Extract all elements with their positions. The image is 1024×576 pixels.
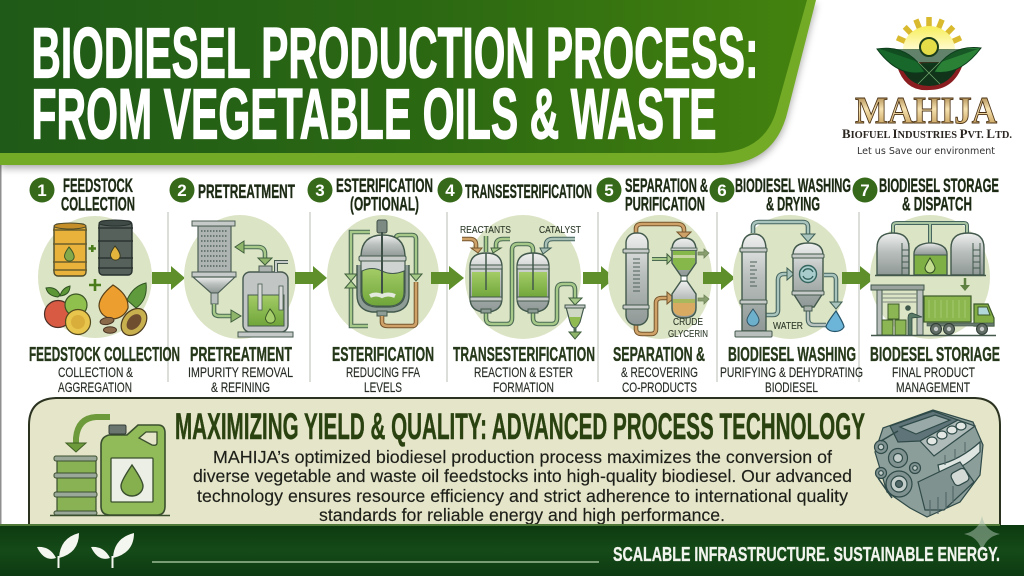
step 4 backdrop <box>465 215 581 339</box>
panel: maximizing yield and quality <box>29 398 1000 560</box>
badge 7 <box>852 178 878 202</box>
step 6 caption: BIODIESEL <box>765 379 818 395</box>
icon: fruits and seeds <box>44 283 152 341</box>
icon: yellow oil barrel <box>53 223 87 276</box>
icon: reactor one <box>470 253 502 313</box>
step 1 heading: FEEDSTOCK <box>63 176 133 197</box>
icon: water drop <box>826 311 844 332</box>
title <box>32 14 759 154</box>
icon: washing column <box>735 234 772 337</box>
badge 4: 4 <box>445 181 455 200</box>
icon: storage pipes <box>893 223 967 243</box>
badge 1: 1 <box>37 181 47 200</box>
footer rule <box>152 561 599 563</box>
panel body text <box>193 447 852 525</box>
step 3 heading: (OPTIONAL) <box>350 194 419 216</box>
step 5 caption: CO-PRODUCTS <box>622 379 697 395</box>
step 5 backdrop <box>608 215 712 339</box>
step 6 caption: PURIFYING & DEHYDRATING <box>720 364 863 380</box>
panel: step 6 biodiesel washing and drying <box>710 176 863 395</box>
logo company name: BIOFUEL INDUSTRIES PVT. LTD. <box>842 126 1012 141</box>
panel body text: diverse vegetable and waste oil feedstocks into high-quality biodiesel. Our advanced <box>193 466 852 486</box>
step 6 heading <box>735 176 851 216</box>
step 3 backdrop <box>327 215 439 339</box>
step 4 labels: CATALYST <box>539 224 581 236</box>
step 7 backdrop <box>870 215 990 339</box>
icon: pretreatment flow arrows <box>214 241 272 322</box>
icon: leaf sprout one <box>37 533 79 568</box>
icon: warehouse with crates and worker <box>871 285 924 335</box>
step 5 caption: SEPARATION & <box>613 344 705 366</box>
step 2 caption <box>188 344 293 395</box>
step 1 caption: FEEDSTOCK COLLECTION <box>29 344 180 366</box>
icon: delivery truck <box>924 296 994 334</box>
step 4 caption: TRANSESTERIFICATION <box>453 344 595 366</box>
step 2 backdrop <box>184 215 296 339</box>
icon: hourglass separator <box>671 238 697 318</box>
step 6 heading: & DRYING <box>766 194 820 216</box>
logo: Mahija Biofuel Industries <box>842 17 1012 157</box>
step 5 label <box>668 316 708 340</box>
panel: step 4 transesterification <box>438 178 595 395</box>
step 3 caption: ESTERIFICATION <box>332 344 434 366</box>
arrow 3 to 4 <box>431 266 464 290</box>
arrow 1 to 2 <box>152 266 185 290</box>
arrow 2 to 3 <box>295 266 327 290</box>
badge 5: 5 <box>604 181 614 200</box>
badge 2 <box>170 178 194 202</box>
badge 3: 3 <box>315 181 325 200</box>
step 5 caption <box>613 344 705 395</box>
badge 6 <box>710 178 734 202</box>
icon: separation pipes <box>636 224 709 334</box>
badge 5 <box>596 178 622 202</box>
panel: step 7 storage and dispatch <box>852 176 1000 395</box>
step 3 caption: LEVELS <box>364 379 402 395</box>
step 3 heading: ESTERIFICATION <box>336 176 433 197</box>
icon: storage silos <box>875 233 986 291</box>
step 3 heading <box>336 176 433 216</box>
panel body text: technology ensures resource efficiency and strict adherence to international quality <box>197 486 848 506</box>
step 1 heading <box>61 176 135 216</box>
badge 2: 2 <box>177 181 187 200</box>
badge 6: 6 <box>717 181 727 200</box>
step 4 caption <box>453 344 595 395</box>
step 4 heading: TRANSESTERIFICATION <box>465 182 592 203</box>
step 5 caption: & RECOVERING <box>621 364 698 380</box>
step 1 backdrop <box>38 216 152 338</box>
logo wordmark: MAHIJA <box>855 90 998 132</box>
step 7 caption <box>870 344 1000 395</box>
icon: dryer vessel <box>792 243 824 311</box>
footer band <box>0 516 1024 576</box>
panel: step 3 esterification <box>308 176 439 395</box>
step 5 label: CRUDE <box>673 316 703 328</box>
step 1 caption: COLLECTION & <box>58 364 133 380</box>
step 3 caption <box>332 344 434 395</box>
dividers <box>168 212 859 382</box>
step 7 heading <box>879 176 999 216</box>
header banner <box>0 0 816 165</box>
step 2 caption: IMPURITY REMOVAL <box>188 364 293 380</box>
badge 7: 7 <box>860 181 870 200</box>
icon: collection vessel <box>565 305 585 339</box>
icon: reactant and catalyst pipes <box>462 236 582 324</box>
panel body text: MAHIJA’s optimized biodiesel production process maximizes the conversion of <box>213 447 832 467</box>
step 7 caption: FINAL PRODUCT <box>892 364 975 380</box>
badge 1 <box>30 178 54 202</box>
water label: WATER <box>773 320 803 332</box>
step 4 caption: FORMATION <box>493 379 554 395</box>
step 5 heading: SEPARATION & <box>625 176 708 197</box>
badge 4 <box>438 178 462 202</box>
icon: engine <box>874 410 983 517</box>
logo tagline: Let us Save our environment <box>857 146 995 157</box>
arrow 6 to 7 <box>842 266 875 290</box>
step 7 caption: MANAGEMENT <box>896 379 970 395</box>
step 1 heading: COLLECTION <box>61 194 135 216</box>
step 1 caption: AGGREGATION <box>58 379 132 395</box>
icon: esterification reactor <box>345 220 422 326</box>
step 5 heading <box>625 176 708 216</box>
step 6 caption <box>720 344 863 395</box>
step 5 heading: PURIFICATION <box>625 194 705 216</box>
step 6 backdrop <box>733 215 847 339</box>
step 4 labels <box>460 224 581 236</box>
step 2 caption: PRETREATMENT <box>190 344 292 366</box>
step 4 caption: REACTION & ESTER <box>474 364 573 380</box>
icon: leaf sprout two <box>91 533 134 568</box>
icon: distillation column <box>623 233 649 325</box>
panel body text: standards for reliable energy and high performance. <box>319 505 725 525</box>
icon: filter and funnel <box>192 221 236 304</box>
icon: settling tank <box>238 262 293 337</box>
step 3 caption: REDUCING FFA <box>346 364 420 380</box>
step 7 heading: & DISPATCH <box>902 194 972 216</box>
icon: reactor two <box>517 253 549 313</box>
badge 3 <box>308 178 332 202</box>
icon: washing pipes <box>753 222 842 325</box>
step 5 label: GLYCERIN <box>668 328 708 340</box>
step 2 heading: PRETREATMENT <box>198 182 295 203</box>
icon: dark oil barrel <box>98 220 133 275</box>
arrow 5 to 6 <box>703 266 735 290</box>
icon: plus signs <box>88 245 101 291</box>
step 1 caption <box>29 344 180 395</box>
arrow 4 to 5 <box>583 266 615 290</box>
step 2 caption: & REFINING <box>211 379 270 395</box>
panel: step 2 pretreatment <box>170 178 296 395</box>
icon: barrel and fuel jug <box>50 417 170 516</box>
panel: step 1 feedstock collection <box>29 176 180 395</box>
panel: step 5 separation and purification <box>596 176 712 395</box>
sparkle mark <box>964 516 1000 552</box>
step 4 labels: REACTANTS <box>460 224 511 236</box>
step 6 heading: BIODIESEL WASHING <box>735 176 851 197</box>
step 6 caption: BIODIESEL WASHING <box>728 344 856 366</box>
